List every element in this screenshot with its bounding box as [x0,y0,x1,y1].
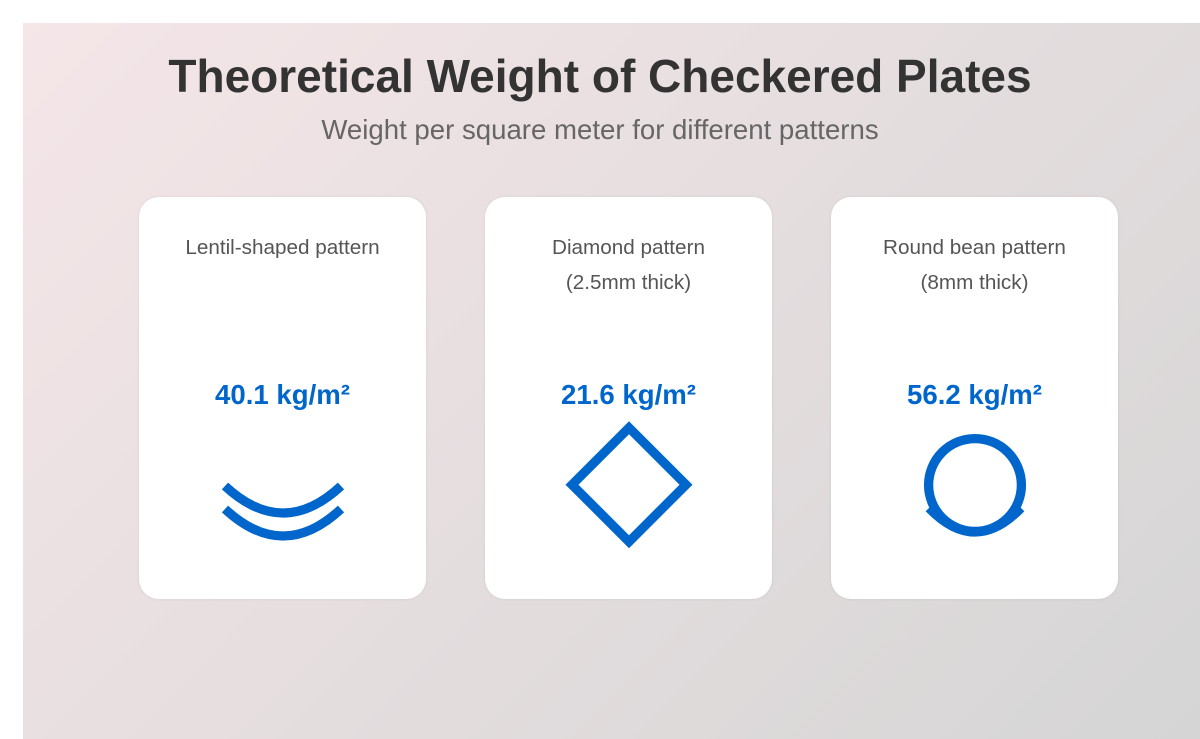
label: diamond pattern: (2.5mm thick) [566,271,691,294]
label: round bean pattern: Round bean pattern [883,236,1066,259]
subtitle: Weight per square meter for different patterns [321,114,879,145]
label: diamond pattern [552,236,705,294]
icon: diamond [572,428,686,542]
panel: diamond pattern [485,197,772,599]
label: diamond pattern: Diamond pattern [552,236,705,259]
value: 21.6 kg/m²: 21.6 kg/m² [561,379,696,410]
label: round bean pattern: (8mm thick) [920,271,1029,294]
value: 40.1 kg/m²: 40.1 kg/m² [215,379,350,410]
icon: lentil curves [225,486,341,536]
value: 56.2 kg/m²: 56.2 kg/m² [907,379,1042,410]
panel: round bean pattern [831,197,1118,599]
icon: round bean [929,439,1021,532]
label: lentil-shaped pattern: Lentil-shaped pattern [185,236,380,259]
title: Theoretical Weight of Checkered Plates [168,50,1032,102]
label: round bean pattern [883,236,1066,294]
panel: lentil-shaped pattern [139,197,426,599]
